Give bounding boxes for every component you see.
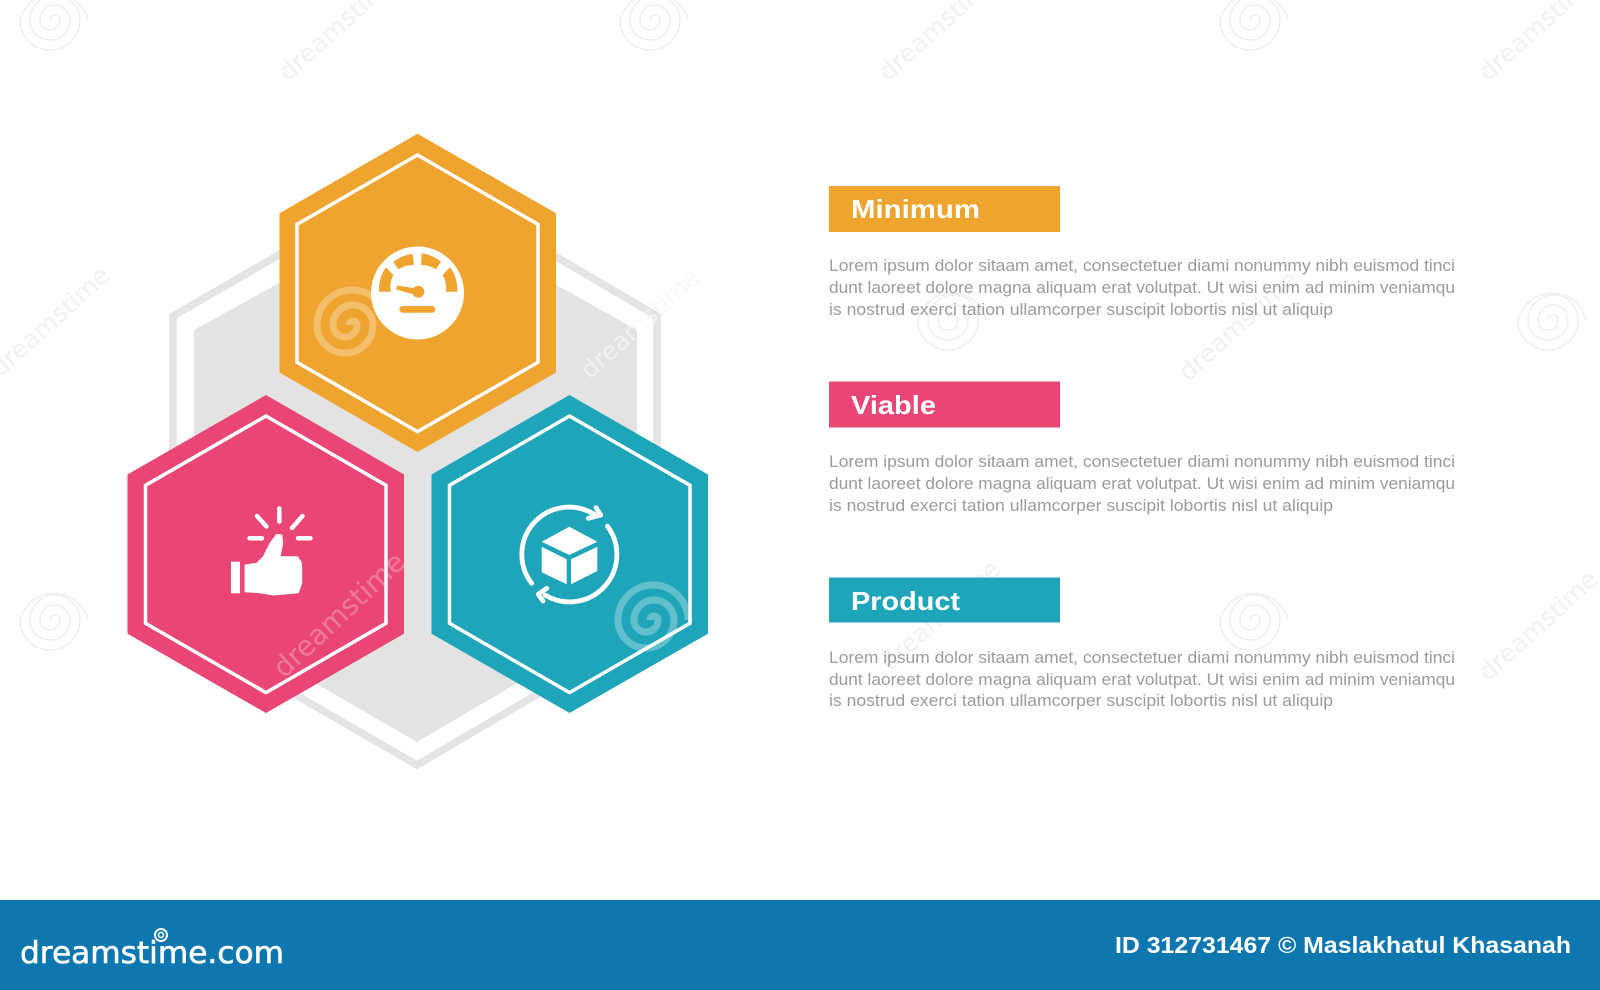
watermark on product hexagon: [618, 585, 688, 648]
text block: minimum: is nostrud exerci tation ullamcorper suscipit lobortis nisl ut aliquip: [829, 300, 1333, 319]
label: product: Product: [851, 586, 960, 616]
icon: speedometer: [371, 246, 464, 340]
watermark over background hexagon: dreamstime: [575, 262, 706, 384]
background watermark: [20, 0, 1586, 650]
text block: product: Lorem ipsum dolor sitaam amet, consectetuer diami nonummy nibh euismod tinci: [829, 648, 1455, 667]
background hexagon fill: [194, 207, 637, 742]
text block: minimum: Lorem ipsum dolor sitaam amet, consectetuer diami nonummy nibh euismod tinci: [829, 256, 1455, 275]
footer logo: dreamstime.com: [20, 936, 284, 971]
hexagon: viable: [128, 395, 404, 713]
text block: minimum: [829, 256, 1455, 319]
text block: viable: is nostrud exerci tation ullamcorper suscipit lobortis nisl ut aliquip: [829, 496, 1333, 515]
watermark on minimum hexagon: [317, 290, 387, 353]
text block: viable: Lorem ipsum dolor sitaam amet, consectetuer diami nonummy nibh euismod tinci: [829, 452, 1455, 471]
background hexagon ring: [173, 175, 657, 765]
text block: minimum: dunt laoreet dolore magna aliquam erat volutpat. Ut wisi enim ad minim veniamqu: [829, 278, 1455, 297]
icon: box with cycle arrows: [522, 507, 617, 602]
footer band: [0, 900, 1600, 990]
label: viable: [829, 382, 1060, 428]
hexagon: minimum: [280, 134, 556, 452]
label: minimum: [829, 186, 1060, 232]
text block: product: [829, 648, 1455, 710]
footer credit: ID 312731467 © Maslakhatul Khasanah: [1115, 932, 1571, 958]
label: viable: Viable: [851, 390, 936, 420]
background watermark text: dreamstime: [875, 554, 1006, 676]
text block: product: dunt laoreet dolore magna aliquam erat volutpat. Ut wisi enim ad minim veniamqu: [829, 670, 1455, 689]
watermark on viable hexagon: dreamstime: [266, 545, 412, 684]
background watermark text: dreamstime: [1173, 264, 1304, 386]
background watermark text: [0, 0, 1600, 686]
icon: thumbs up: [231, 508, 310, 595]
text block: viable: dunt laoreet dolore magna aliquam erat volutpat. Ut wisi enim ad minim veniamqu: [829, 474, 1455, 493]
text block: product: is nostrud exerci tation ullamcorper suscipit lobortis nisl ut aliquip: [829, 691, 1333, 710]
hexagon: product: [432, 395, 708, 713]
background watermark text: dreamstime: [1473, 564, 1600, 686]
text block: viable: [829, 452, 1455, 515]
label: product: [829, 578, 1060, 622]
label: minimum: Minimum: [851, 194, 980, 224]
background watermark text: dreamstime: [575, 262, 706, 384]
